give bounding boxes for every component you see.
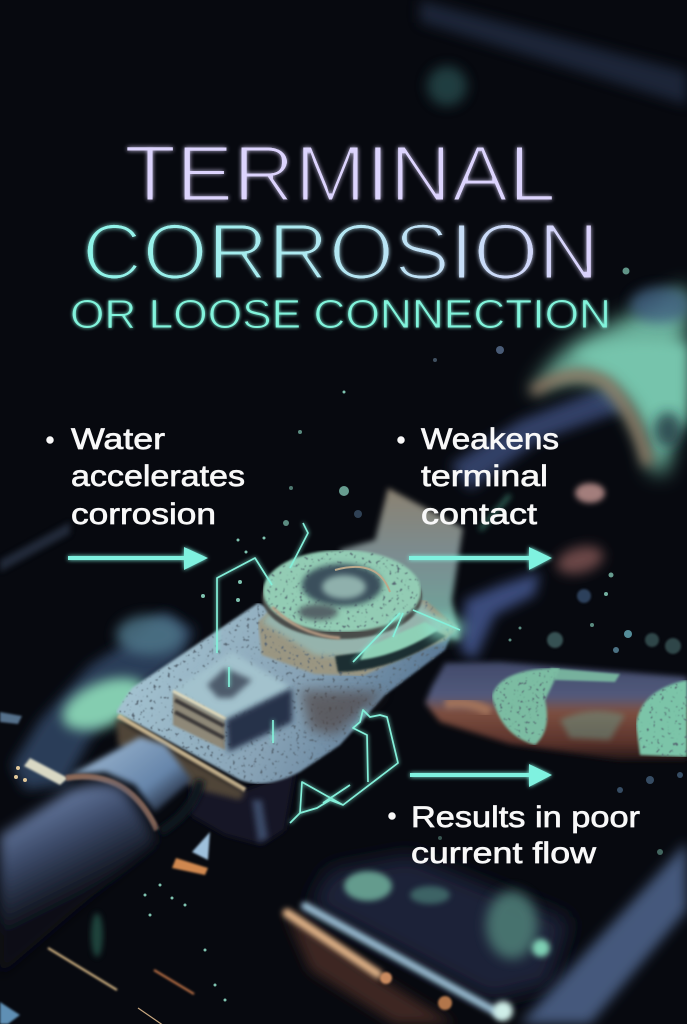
- trace: upper bolt connector: [217, 558, 272, 653]
- trace: lower lightning shape: [290, 710, 398, 823]
- trace: bolt lines: [229, 667, 273, 743]
- callout: results in poor current flow: [389, 801, 640, 870]
- right copper cable: [425, 662, 687, 760]
- corroded upper-right cable: [450, 285, 687, 660]
- corrosion speckles: [144, 268, 683, 1002]
- callout: weakens terminal contact: terminal: [421, 460, 548, 493]
- callout: water accelerates corrosion: Water: [71, 423, 165, 456]
- callout: results in poor current flow: Results in poor: [411, 801, 640, 834]
- arrow: third callout: [410, 764, 552, 787]
- trace: nut cracks: [353, 610, 460, 662]
- callout: water accelerates corrosion: [47, 423, 245, 531]
- callout: weakens terminal contact: Weakens: [421, 423, 559, 456]
- arrow: second callout: [409, 547, 552, 570]
- terminal clamp body: [116, 603, 455, 845]
- title line: CORROSION: CORROSION: [82, 207, 599, 296]
- terminal lug: [340, 488, 463, 640]
- callout: water accelerates corrosion: corrosion: [71, 498, 216, 531]
- callout: results in poor current flow: current flow: [411, 837, 596, 870]
- neon circuit traces: [217, 523, 460, 823]
- big corroded nut: [258, 550, 465, 676]
- arrow: first callout: [68, 547, 208, 570]
- left blurred corroded block: [12, 612, 195, 790]
- callout: weakens terminal contact: contact: [421, 498, 538, 531]
- callout: water accelerates corrosion: accelerates: [71, 460, 245, 493]
- trace: upper nut spark: [290, 523, 308, 568]
- callout: weakens terminal contact: [398, 423, 559, 531]
- blurred background shapes: [0, 0, 687, 790]
- left collar and black cable: [0, 737, 210, 975]
- small bolt: [173, 652, 292, 752]
- subtitle: OR LOOSE CONNECTION: OR LOOSE CONNECTION: [70, 291, 611, 337]
- lower corroded plate and streaks: [0, 842, 687, 1024]
- title line: TERMINAL: TERMINAL: [124, 129, 556, 218]
- title: [70, 129, 611, 337]
